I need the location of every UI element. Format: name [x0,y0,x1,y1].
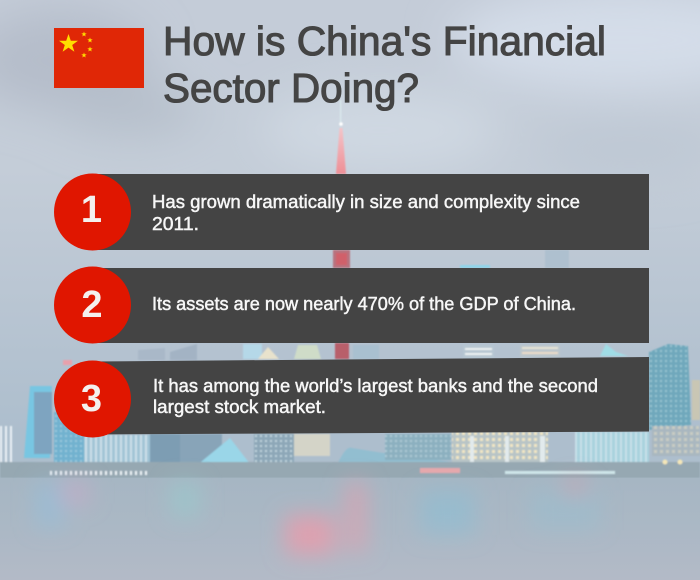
number badge 3: 3 [81,378,102,420]
waterfront [0,462,700,478]
number badge 3 [54,360,131,438]
left mid-rise buildings [54,412,100,466]
title [163,18,606,111]
bar 3 [92,357,649,434]
tower [340,100,341,126]
title: Sector Doing? [163,65,419,111]
central and right buildings [335,448,452,474]
item 2 [54,266,649,344]
item 3 [54,357,649,438]
right tower [649,344,691,430]
title: How is China's Financial [163,18,606,64]
flag of China [54,28,144,88]
icon: small stars [81,32,93,58]
text 1: 2011. [152,214,199,234]
number badge 1: 1 [81,189,102,231]
text 2: Its assets are now nearly 470% of the GDP of China. [152,294,576,314]
text 1: Has grown dramatically in size and complexity since [152,192,580,212]
number badge 1 [54,174,131,250]
text 3: It has among the world’s largest banks and the second [153,376,598,396]
lit buildings between bars [243,344,262,359]
text 3: largest stock market. [153,397,326,417]
text 3 [153,376,598,417]
bar 2 [92,268,649,343]
number badge 2: 2 [81,284,103,326]
text 1 [152,192,580,234]
icon: large star [59,34,78,52]
distant buildings [545,250,569,268]
item 1 [54,174,649,250]
number badge 2 [54,266,131,344]
bar 1 [92,174,649,250]
left towers [63,360,72,365]
